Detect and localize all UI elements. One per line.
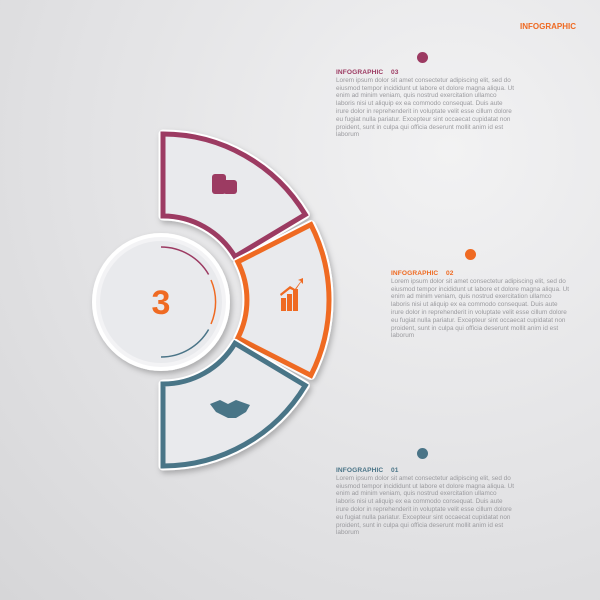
dot 01: [417, 448, 428, 459]
segment: bottom teal: [163, 343, 305, 466]
icon: coins: [212, 174, 237, 194]
icon: chart: [280, 278, 303, 311]
text block 03: Lorem ipsum dolor sit amet consectetur adipiscing elit, sed do eiusmod tempor incididunt ut labore et dolore magna aliqua. Ut enim ad minim veniam, quis nostrud exercitation ullamco laboris nisi ut aliquip ex ea commodo consequat. Duis aute irure dolor in reprehenderit in voluptate velit esse cillum dolore eu fugiat nulla pariatur. Excepteur sint occaecat cupidatat non proident, sunt in culpa qui officia deserunt mollit anim id est laborum: [336, 77, 514, 138]
dot 02: [465, 249, 476, 260]
center circle: [94, 235, 228, 369]
text block 02: Lorem ipsum dolor sit amet consectetur adipiscing elit, sed do eiusmod tempor incididunt ut labore et dolore magna aliqua. Ut enim ad minim veniam, quis nostrud exercitation ullamco laboris nisi ut aliquip ex ea commodo consequat. Duis aute irure dolor in reprehenderit in voluptate velit esse cillum dolore eu fugiat nulla pariatur. Excepteur sint occaecat cupidatat non proident, sunt in culpa qui officia deserunt mollit anim id est laborum: [391, 278, 569, 339]
segment: middle orange: [238, 225, 329, 375]
text block 01: Lorem ipsum dolor sit amet consectetur adipiscing elit, sed do eiusmod tempor incididunt ut labore et dolore magna aliqua. Ut enim ad minim veniam, quis nostrud exercitation ullamco laboris nisi ut aliquip ex ea commodo consequat. Duis aute irure dolor in reprehenderit in voluptate velit esse cillum dolore eu fugiat nulla pariatur. Excepteur sint occaecat cupidatat non proident, sunt in culpa qui officia deserunt mollit anim id est laborum: [336, 475, 514, 536]
text block 03: INFOGRAPHIC 03: [336, 69, 399, 76]
text block 02: INFOGRAPHIC 02: [391, 270, 454, 277]
segment: top purple: [163, 134, 305, 257]
icon: handshake: [210, 400, 250, 418]
text block 01: INFOGRAPHIC 01: [336, 467, 399, 474]
number: 3: [152, 284, 170, 322]
header label: INFOGRAPHIC: [520, 22, 576, 31]
dot 03: [417, 52, 428, 63]
